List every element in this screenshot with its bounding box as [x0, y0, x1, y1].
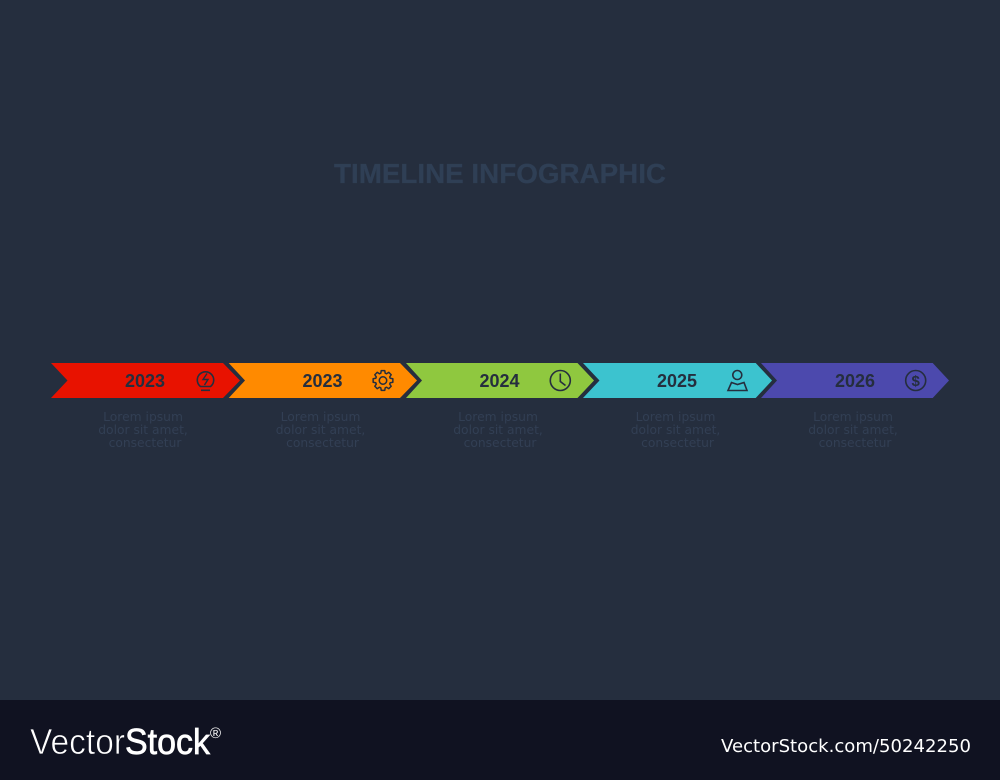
caption: consectetur	[464, 436, 537, 450]
caption: dolor sit amet,	[808, 423, 898, 437]
caption: consectetur	[286, 436, 360, 450]
arrow: purple	[761, 363, 949, 398]
caption: Lorem ipsum	[813, 410, 893, 424]
logo: registered mark: ®	[210, 725, 221, 742]
year: 2023: 2023	[302, 371, 342, 391]
year: 2025: 2025	[657, 371, 697, 391]
arrow: red	[51, 363, 240, 398]
caption: dolor sit amet,	[453, 423, 543, 437]
caption: Lorem ipsum	[458, 410, 538, 424]
panel: timeline step 4	[583, 363, 772, 450]
year: 2023: 2023	[125, 371, 165, 391]
year: 2024: 2024	[480, 371, 520, 391]
caption: consectetur	[819, 436, 892, 450]
arrow: teal	[583, 363, 772, 398]
icon: gear	[373, 371, 393, 390]
footer bar	[0, 700, 1000, 780]
caption: dolor sit amet,	[276, 423, 365, 437]
panel: timeline step 1	[51, 363, 240, 450]
panel: timeline step 2	[229, 363, 417, 450]
caption: Lorem ipsum	[281, 410, 360, 424]
logo: Vector: Vector	[30, 721, 125, 762]
title: TIMELINE INFOGRAPHIC	[334, 158, 666, 189]
caption: consectetur	[109, 436, 182, 450]
icon: clock	[550, 370, 570, 390]
caption: dolor sit amet,	[98, 423, 188, 437]
panel: timeline step 3	[406, 363, 594, 450]
arrow: orange	[229, 363, 417, 398]
footer: image id: VectorStock.com/50242250	[721, 736, 971, 757]
caption: Lorem ipsum	[636, 410, 715, 424]
panel: timeline step 5	[761, 363, 949, 450]
icon: dollar coin: $	[912, 373, 921, 390]
icon: dollar coin	[906, 370, 926, 390]
icon: light bulb	[197, 372, 214, 390]
caption: Lorem ipsum	[103, 410, 183, 424]
logo: Stock: Stock	[125, 721, 211, 762]
year: 2026: 2026	[835, 371, 875, 391]
arrow: green	[406, 363, 594, 398]
caption: consectetur	[641, 436, 715, 450]
icon: person	[728, 370, 747, 390]
caption: dolor sit amet,	[631, 423, 720, 437]
